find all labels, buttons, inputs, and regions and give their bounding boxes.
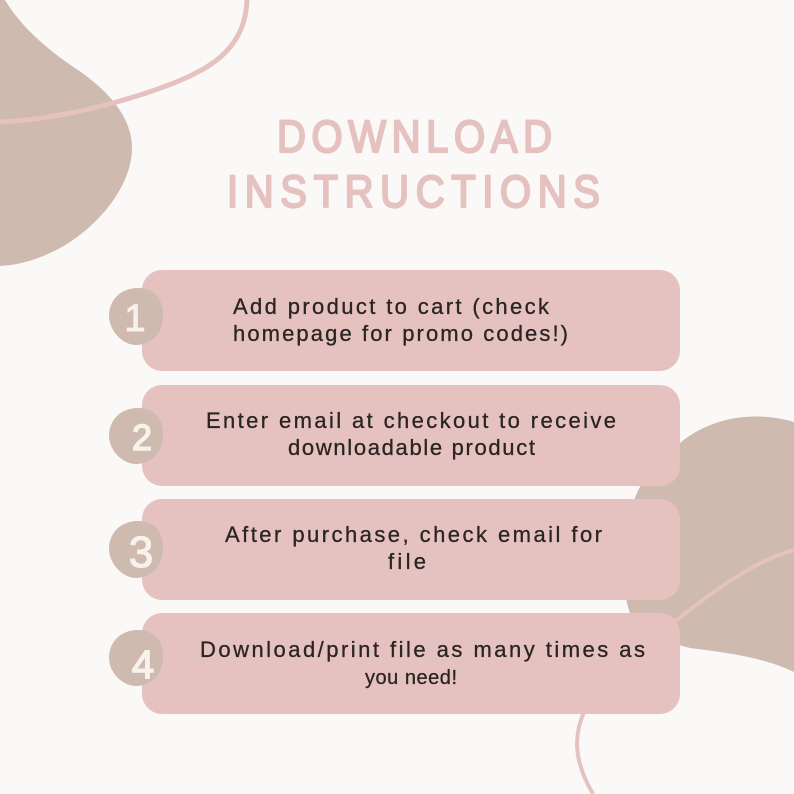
step 4 card xyxy=(142,613,680,714)
step 2 card xyxy=(142,385,680,486)
step 4 number badge xyxy=(109,630,163,686)
step 3 text xyxy=(225,522,602,574)
right decorative blob xyxy=(624,417,794,672)
step 3 number badge xyxy=(109,521,163,578)
right curved line xyxy=(670,550,794,625)
step 4 text: Download/print file as many times as xyxy=(200,637,645,662)
step 3 text: file xyxy=(388,549,426,574)
step 1 card xyxy=(142,270,680,371)
title: INSTRUCTIONS xyxy=(227,167,600,218)
step 1 text xyxy=(233,294,568,346)
step 1 xyxy=(109,270,680,371)
step 2 number: 2 xyxy=(132,417,152,458)
step 4 text xyxy=(200,637,645,689)
step 3 card xyxy=(142,499,680,600)
title xyxy=(227,112,600,218)
step 1 number: 1 xyxy=(124,298,146,340)
step 2 text: Enter email at checkout to receive xyxy=(206,408,616,433)
step 3 number: 3 xyxy=(129,528,153,577)
bottom curved line xyxy=(577,712,593,794)
step 4 text: you need! xyxy=(365,667,457,689)
step 2 xyxy=(109,385,680,486)
step 4 xyxy=(109,613,680,714)
step 2 text xyxy=(206,408,616,460)
step 4 number: 4 xyxy=(132,643,154,687)
top-left curved line xyxy=(0,0,247,122)
title: DOWNLOAD xyxy=(277,112,552,163)
step 1 text: Add product to cart (check xyxy=(233,294,550,319)
step 1 text: homepage for promo codes!) xyxy=(233,321,568,346)
step 3 xyxy=(109,499,680,600)
top-left decorative blob xyxy=(0,0,132,266)
step 1 number badge xyxy=(109,288,163,345)
step 2 text: downloadable product xyxy=(288,435,535,460)
step 3 text: After purchase, check email for xyxy=(225,522,602,547)
step 2 number badge xyxy=(109,408,163,464)
